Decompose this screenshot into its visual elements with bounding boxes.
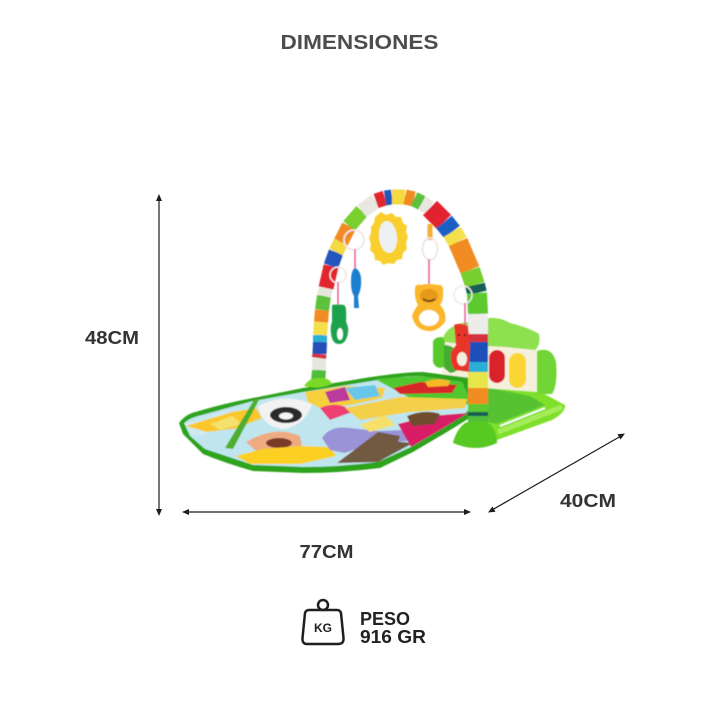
arch feet <box>304 378 497 448</box>
title: DIMENSIONES <box>280 32 438 54</box>
toy: blue rattle <box>344 230 364 308</box>
weight label: 916 GR <box>360 627 426 647</box>
product: baby play gym <box>179 197 565 473</box>
arch <box>318 197 478 426</box>
icon: kg weight: KG <box>314 621 332 635</box>
weight label: PESO <box>360 609 410 629</box>
toy: green frog teether <box>330 267 348 344</box>
arrow: height <box>156 194 162 516</box>
arrow: width <box>182 509 471 515</box>
piano base <box>432 318 565 440</box>
label: height: 48CM <box>85 328 139 348</box>
label: width: 77CM <box>300 542 354 562</box>
weight block <box>302 600 426 647</box>
toy: red bear teether <box>451 286 472 372</box>
play mat <box>179 372 478 473</box>
toy: sun mirror <box>369 212 408 265</box>
label: depth: 40CM <box>560 491 616 511</box>
arrow: depth <box>488 434 625 512</box>
toy: monkey teether <box>412 224 445 331</box>
